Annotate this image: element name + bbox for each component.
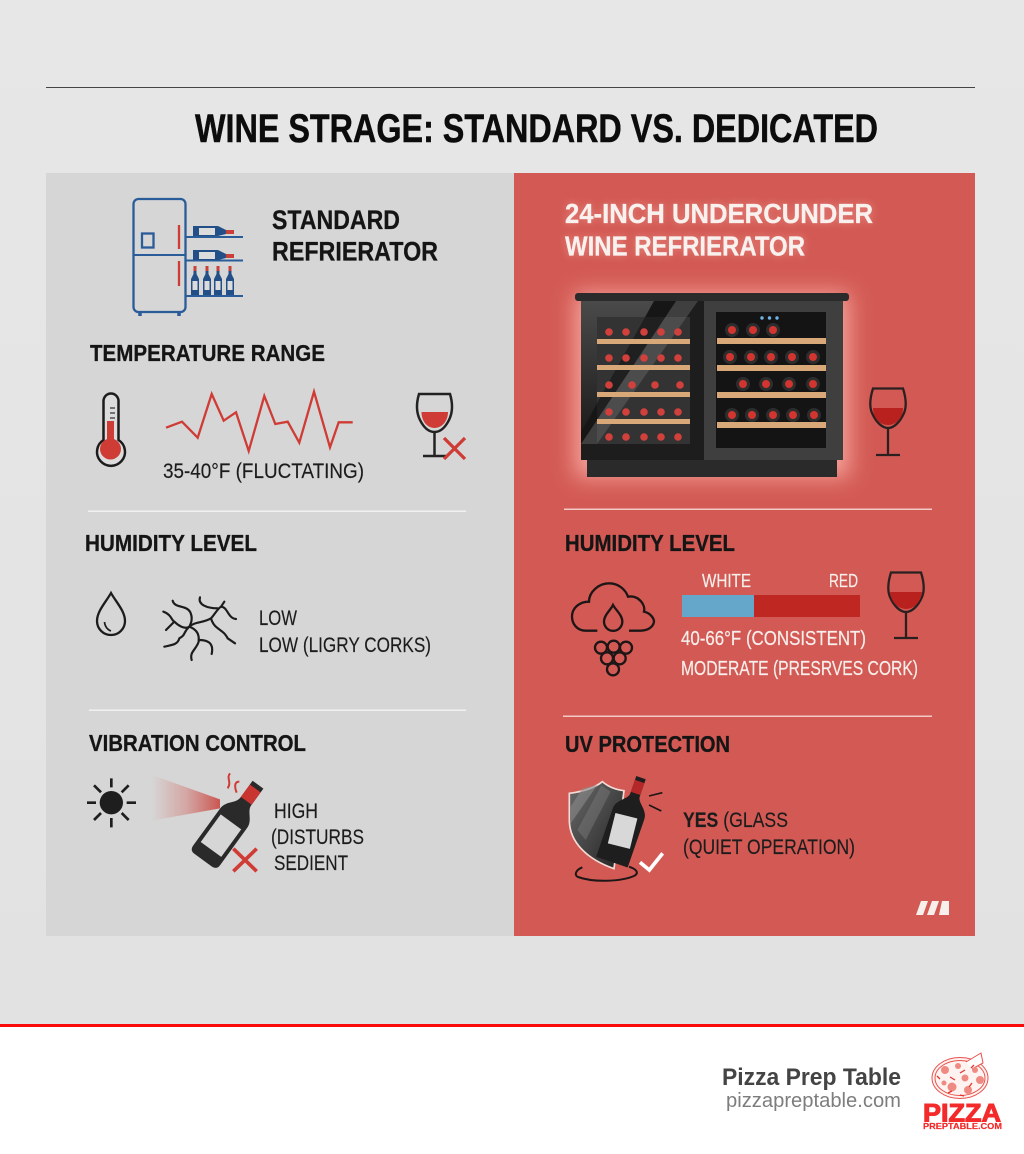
panel: wine refrigerator bbox=[514, 173, 975, 936]
footer brand name: Pizza Prep Table bbox=[722, 1064, 901, 1091]
icon: thermometer bbox=[97, 394, 125, 466]
text: temperature value: 35-40°F (FLUCTATING) bbox=[163, 460, 364, 483]
text: UV protection value: YES (GLASS bbox=[683, 809, 788, 832]
heading: temperature range: TEMPERATURE RANGE bbox=[90, 340, 325, 366]
icon: cloud with drop and grapes bbox=[572, 583, 654, 675]
text: temperature and humidity values: MODERATE (PRESRVES CORK) bbox=[681, 657, 918, 680]
wine cooler appliance bbox=[575, 293, 849, 477]
text: humidity value: LOW (LIGRY CORKS) bbox=[259, 634, 431, 657]
icon: wine glass bbox=[888, 572, 924, 638]
heading: standard refrigerator bbox=[272, 205, 438, 266]
heading: standard refrigerator: STANDARD bbox=[272, 205, 400, 235]
text: vibration value: (DISTURBS bbox=[271, 826, 364, 849]
heading: standard refrigerator: REFRIERATOR bbox=[272, 236, 438, 266]
chart: fluctuating temperature line bbox=[166, 392, 353, 451]
text: UV protection value: (QUIET OPERATION) bbox=[683, 836, 855, 859]
heading: wine refrigerator: WINE REFRIERATOR bbox=[565, 230, 805, 262]
logo wordmark: PIZZA bbox=[923, 1100, 1001, 1128]
heading: humidity level: HUMIDITY LEVEL bbox=[565, 530, 735, 556]
heading: humidity level: HUMIDITY LEVEL bbox=[85, 530, 257, 556]
icon: sun with light beam bbox=[87, 775, 220, 827]
footer url: pizzapreptable.com bbox=[726, 1090, 901, 1112]
icon: shield with bottle bbox=[569, 772, 663, 881]
text: vibration value bbox=[271, 800, 364, 875]
panel: standard refrigerator bbox=[46, 173, 514, 936]
text: vibration value: SEDIENT bbox=[274, 852, 348, 875]
text: temperature and humidity values: 40-66°F (CONSISTENT) bbox=[681, 627, 866, 650]
icon: corner mark bbox=[916, 901, 949, 915]
logo: pizza bbox=[923, 1053, 1002, 1131]
heading: wine refrigerator bbox=[565, 198, 873, 262]
right door bbox=[716, 312, 826, 448]
heading: vibration control: VIBRATION CONTROL bbox=[89, 730, 306, 756]
bar: white and red temperature zones bbox=[682, 571, 860, 617]
heading: UV protection: UV PROTECTION bbox=[565, 731, 730, 757]
footer bbox=[0, 1024, 1024, 1154]
text: humidity value: LOW bbox=[259, 607, 297, 630]
top rule bbox=[46, 87, 975, 88]
heading: wine refrigerator: WINE REFRIERATOR bbox=[565, 230, 805, 262]
bar: white and red temperature zones: WHITE bbox=[702, 571, 751, 591]
heading: wine refrigerator: 24-INCH UNDERCUNDER bbox=[565, 198, 873, 229]
icon: wine glass bbox=[870, 388, 906, 455]
icon: cracked cork bbox=[163, 597, 236, 660]
icon: wine glass with cross bbox=[417, 394, 465, 459]
text: temperature and humidity values bbox=[681, 627, 918, 680]
left glass door bbox=[581, 301, 704, 460]
text: vibration value: HIGH bbox=[274, 800, 318, 823]
icon: tilted wine bottle with cross bbox=[190, 773, 271, 871]
heading: wine refrigerator: 24-INCH UNDERCUNDER bbox=[565, 198, 873, 229]
bar: white and red temperature zones: RED bbox=[829, 571, 858, 591]
text: UV protection value bbox=[683, 809, 855, 859]
text: humidity value bbox=[259, 607, 431, 657]
title: WINE STRAGE: STANDARD VS. DEDICATED bbox=[195, 107, 878, 151]
icon: water drop bbox=[97, 593, 125, 635]
icon: refrigerator with bottles bbox=[134, 199, 243, 316]
logo wordmark: PREPTABLE.COM bbox=[923, 1121, 1002, 1131]
